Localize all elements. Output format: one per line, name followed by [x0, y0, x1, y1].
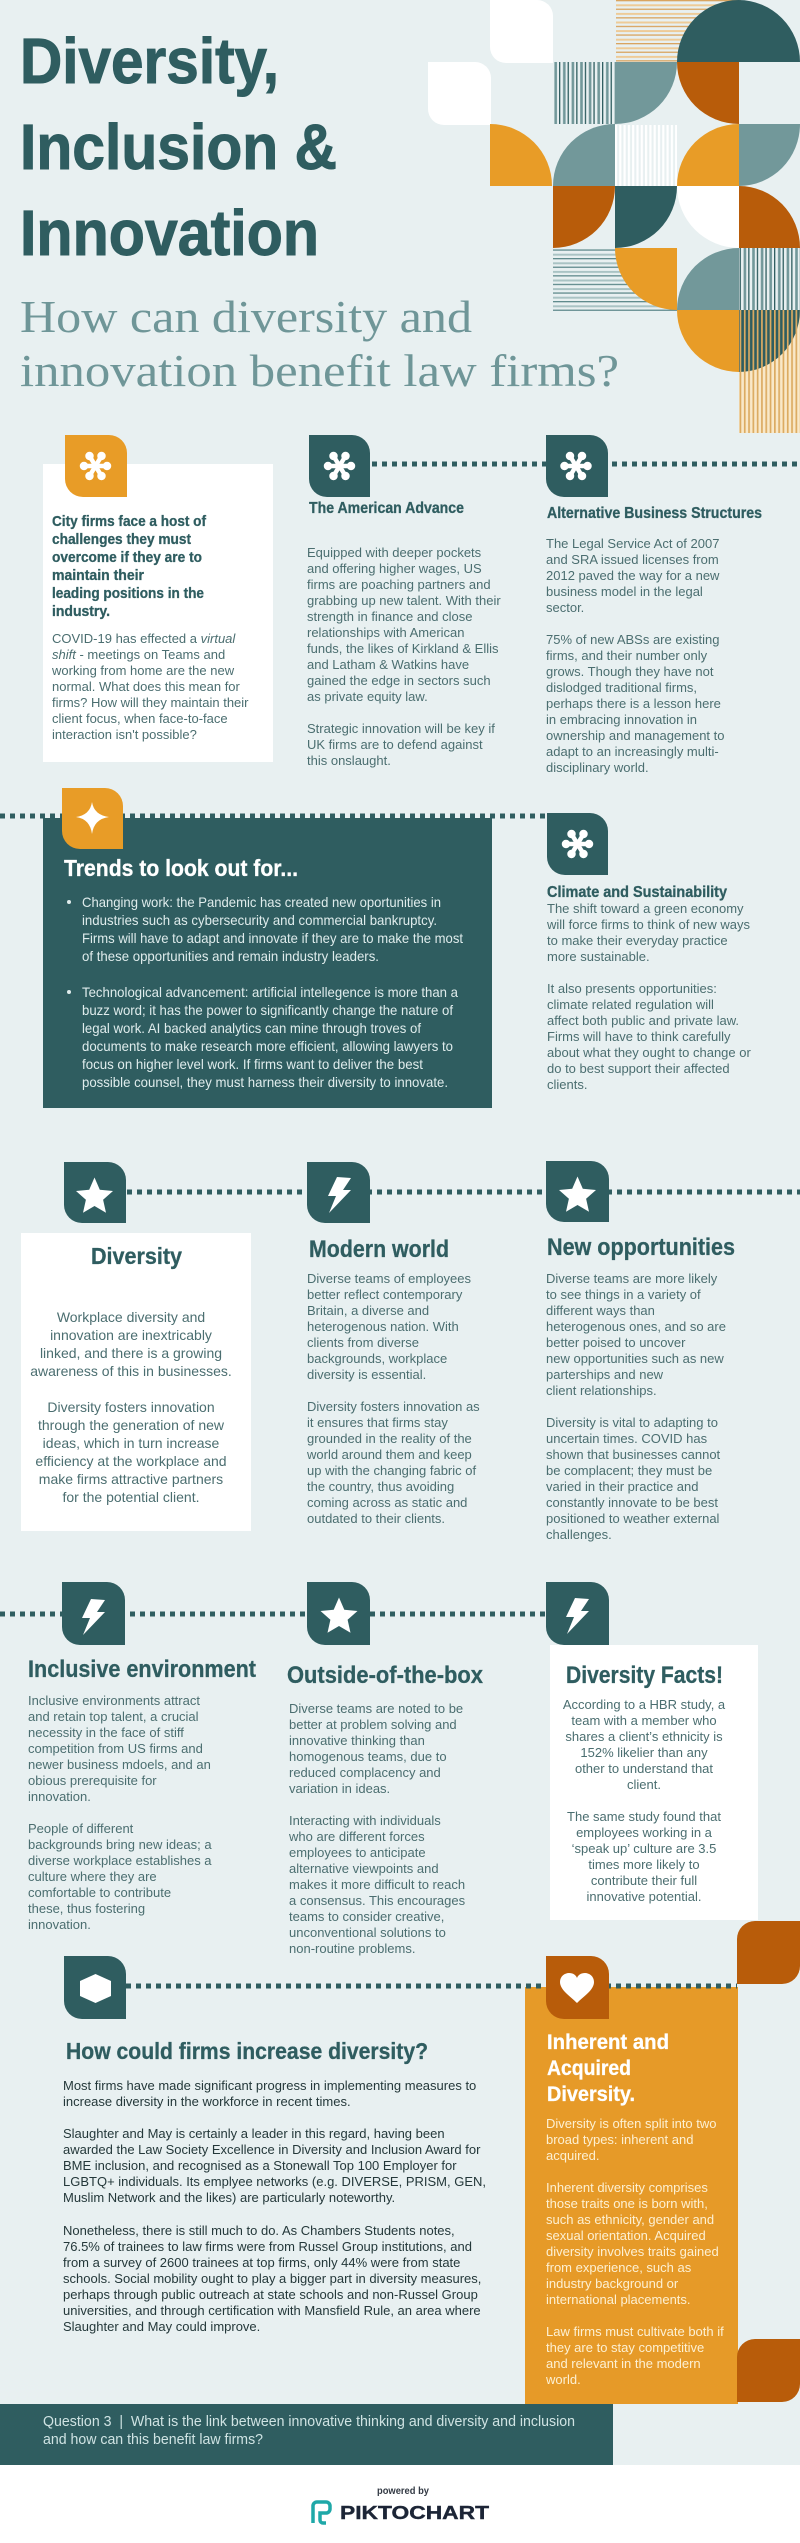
body: shares a client’s ethnicity is — [565, 1729, 723, 1744]
heading: Inherent and — [547, 2031, 669, 2054]
heading: Acquired — [547, 2057, 631, 2080]
icon: asterisk orange — [65, 435, 127, 497]
intro heading: challenges they must — [52, 532, 191, 548]
heading: Diversity. — [547, 2083, 635, 2106]
intro body: firms? How will they maintain their — [52, 695, 249, 710]
body: and relevant in the modern — [546, 2356, 701, 2371]
decorative tile top — [737, 1921, 800, 1984]
body: The shift toward a green economy — [547, 901, 744, 916]
body: acquired. — [546, 2148, 599, 2163]
panel: inclusive environment — [28, 1582, 256, 1932]
footer branding: powered by — [377, 2486, 429, 2497]
icon: star — [307, 1582, 370, 1645]
body: sector. — [546, 600, 584, 615]
body: increase diversity in the workforce in recent times. — [63, 2094, 351, 2109]
body: awareness of this in businesses. — [30, 1363, 232, 1379]
body: constantly innovate to be best — [546, 1495, 718, 1510]
body: unconventional solutions to — [289, 1925, 446, 1940]
body: these, thus fostering — [28, 1901, 145, 1916]
body: it ensures that firms stay — [307, 1415, 448, 1430]
intro body: COVID-19 has effected a virtual — [52, 631, 235, 646]
body: perhaps there is a lesson here — [546, 696, 721, 711]
body: BME inclusion, and recognised as a Stonewall Top 100 Employer for — [63, 2158, 457, 2173]
intro body: shift - meetings on Teams and — [52, 647, 225, 662]
body: such as ethnicity, gender and — [546, 2212, 714, 2227]
icon: asterisk — [309, 435, 370, 497]
bullet list: buzz word; it has the power to significantly change the nature of — [82, 1003, 453, 1018]
connector dots row 5 — [126, 1984, 737, 1988]
body: broad types: inherent and — [546, 2132, 693, 2147]
body: The same study found that — [567, 1809, 721, 1824]
icon: star — [64, 1162, 126, 1223]
body: heterogenous nation. With — [307, 1319, 459, 1334]
body: People of different — [28, 1821, 134, 1836]
panel: the American advance — [307, 435, 501, 768]
body: as private equity law. — [307, 689, 428, 704]
bullet list: documents to make research more efficient, allowing lawyers to — [82, 1039, 453, 1054]
connector dots row 1 — [372, 462, 800, 466]
body: coming across as static and — [307, 1495, 467, 1510]
panel: climate and sustainability — [546, 813, 751, 1092]
bullet list: industries such as cybersecurity and commercial bankruptcy. — [82, 913, 437, 928]
body: for the potential client. — [63, 1489, 199, 1505]
body: Firms will have to think carefully — [547, 1029, 731, 1044]
body: affect both public and private law. — [547, 1013, 739, 1028]
title: Inclusion & — [20, 111, 337, 183]
panel: trends to look out for — [0, 788, 546, 1108]
body: better at problem solving and — [289, 1717, 457, 1732]
body: from experience, such as — [546, 2260, 692, 2275]
footer question band: Question 3 | What is the link between innovative thinking and diversity and inclusion — [43, 2414, 575, 2430]
connector dots row 3 — [127, 1190, 800, 1194]
body: and SRA issued licenses from — [546, 552, 719, 567]
title — [20, 25, 337, 269]
body: Diverse teams are noted to be — [289, 1701, 463, 1716]
body: Workplace diversity and — [57, 1309, 205, 1325]
body: relationships with American — [307, 625, 465, 640]
body: Strategic innovation will be key if — [307, 721, 495, 736]
body: Muslim Network and the likes) are particularly noteworthy. — [63, 2190, 395, 2205]
intro heading: maintain their — [52, 568, 144, 584]
body: varied in their practice and — [546, 1479, 698, 1494]
heading — [547, 2031, 669, 2106]
body: in embracing innovation in — [546, 712, 697, 727]
intro heading: City firms face a host of — [52, 514, 206, 530]
icon: asterisk — [546, 435, 608, 497]
body: Inherent diversity comprises — [546, 2180, 708, 2195]
body: Inclusive environments attract — [28, 1693, 200, 1708]
panel: new opportunities — [546, 1161, 735, 1542]
body: teams to consider creative, — [289, 1909, 444, 1924]
body: Diverse teams are more likely — [546, 1271, 718, 1286]
decorative tile bottom — [737, 2339, 800, 2402]
bullet list: legal work. AI backed analytics can mine through troves of — [82, 1021, 421, 1036]
panel: diversity facts — [546, 1582, 758, 1920]
body: do to best support their affected — [547, 1061, 730, 1076]
icon: lightning bolt — [546, 1582, 609, 1645]
panel background — [43, 818, 492, 1108]
body: firms, and their number only — [546, 648, 708, 663]
body: and Latham & Watkins have — [307, 657, 469, 672]
geometric pattern — [428, 0, 800, 433]
body: The Legal Service Act of 2007 — [546, 536, 719, 551]
bullet list: focus on higher level work. If firms want to deliver the best — [82, 1057, 423, 1072]
body: about what they ought to change or — [547, 1045, 751, 1060]
body: alternative viewpoints and — [289, 1861, 439, 1876]
body: ownership and management to — [546, 728, 725, 743]
body: adapt to an increasingly multi- — [546, 744, 719, 759]
body: Diversity fosters innovation as — [307, 1399, 480, 1414]
card background — [43, 464, 273, 762]
panel: intro card — [43, 435, 273, 762]
heading: Diversity Facts! — [566, 1662, 723, 1689]
intro heading: leading positions in the — [52, 586, 204, 602]
subtitle: How can diversity and — [20, 291, 472, 342]
heading: Alternative Business Structures — [547, 505, 762, 522]
body: innovative thinking than — [289, 1733, 425, 1748]
body: 76.5% of trainees to law firms were from Russel Group institutions, and — [63, 2239, 472, 2254]
body: Diversity is often split into two — [546, 2116, 717, 2131]
footer branding: PIKTOCHART — [340, 2503, 489, 2523]
body: will force firms to think of new ways — [546, 917, 751, 932]
body: It also presents opportunities: — [547, 981, 717, 996]
body: through the generation of new — [38, 1417, 225, 1433]
bullet list — [67, 895, 463, 1090]
body: necessity in the face of stiff — [28, 1725, 184, 1740]
body: makes it more difficult to reach — [289, 1877, 465, 1892]
body: who are different forces — [288, 1829, 425, 1844]
body: heterogenous ones, and so are — [546, 1319, 726, 1334]
icon: heart — [546, 1956, 609, 2019]
body: diversity is essential. — [307, 1367, 426, 1382]
body: better reflect contemporary — [307, 1287, 463, 1302]
heading: New opportunities — [547, 1234, 735, 1261]
intro body: interaction isn't possible? — [52, 727, 197, 742]
body: world. — [545, 2372, 581, 2387]
body: schools. Social mobility ought to play a bigger part in diversity measures, — [63, 2271, 481, 2286]
panel: outside of the box — [287, 1582, 484, 1956]
panel background — [525, 1987, 738, 2404]
body: uncertain times. COVID has — [546, 1431, 708, 1446]
body: comfortable to contribute — [28, 1885, 171, 1900]
heading: How could firms increase diversity? — [66, 2038, 428, 2064]
body: Britain, a diverse and — [307, 1303, 429, 1318]
body: better poised to uncover — [546, 1335, 686, 1350]
intro heading: industry. — [52, 604, 110, 620]
body: Law firms must cultivate both if — [546, 2324, 724, 2339]
body: contribute their full — [591, 1873, 697, 1888]
body: Diverse teams of employees — [307, 1271, 472, 1286]
body: clients. — [547, 1077, 587, 1092]
body: times more likely to — [588, 1857, 700, 1872]
body: different ways than — [546, 1303, 655, 1318]
panel: inherent text — [545, 1956, 724, 2387]
body: 2012 paved the way for a new — [546, 568, 720, 583]
heading: Diversity — [91, 1243, 182, 1269]
connector dots row 2 — [0, 814, 546, 818]
subtitle: innovation benefit law firms? — [20, 345, 619, 396]
body: diverse workplace establishes a — [28, 1853, 212, 1868]
panel: alternative business structures — [546, 435, 762, 775]
body: team with a member who — [571, 1713, 717, 1728]
body: innovative potential. — [587, 1889, 701, 1904]
icon: hexagon — [64, 1956, 126, 2019]
footer question band — [0, 2404, 613, 2465]
intro body: client focus, when face-to-face — [52, 711, 228, 726]
body: universities, and through certification with Mansfield Rule, an area where — [63, 2303, 481, 2318]
bullet list: Changing work: the Pandemic has created new oportunities in — [82, 895, 441, 910]
body: a consensus. This encourages — [289, 1893, 466, 1908]
body: efficiency at the workplace and — [35, 1453, 227, 1469]
body: grabbing up new talent. With their — [307, 593, 501, 608]
body: parterships and new — [546, 1367, 664, 1382]
body: ideas, which in turn increase — [43, 1435, 220, 1451]
bullet list: of these opportunities and remain industry leaders. — [82, 949, 379, 964]
title: Innovation — [20, 197, 319, 269]
body: those traits one is born with, — [546, 2196, 708, 2211]
body: backgrounds bring new ideas; a — [28, 1837, 212, 1852]
body: 152% likelier than any — [580, 1745, 708, 1760]
body: gained the edge in sectors such — [307, 673, 491, 688]
body: disciplinary world. — [546, 760, 649, 775]
body: grows. Though they have not — [546, 664, 714, 679]
body: client. — [627, 1777, 661, 1792]
heading: Climate and Sustainability — [547, 884, 727, 901]
card background — [21, 1233, 251, 1531]
body: climate related regulation will — [547, 997, 714, 1012]
body: up with the changing fabric of — [307, 1463, 476, 1478]
icon: lightning bolt — [62, 1582, 125, 1645]
body: positioned to weather external — [546, 1511, 720, 1526]
body: strength in finance and close — [307, 609, 472, 624]
panel: modern world — [306, 1162, 480, 1526]
panel: how could firms increase diversity — [63, 1956, 486, 2334]
body: clients from diverse — [307, 1335, 419, 1350]
body: challenges. — [546, 1527, 612, 1542]
body: the country, thus avoiding — [307, 1479, 454, 1494]
body: client relationships. — [546, 1383, 657, 1398]
body: make firms attractive partners — [39, 1471, 223, 1487]
body: According to a HBR study, a — [563, 1697, 726, 1712]
body: world around them and keep — [306, 1447, 472, 1462]
body: LGBTQ+ individuals. Its emplyee networks (e.g. DIVERSE, PRISM, GEN, — [63, 2174, 486, 2189]
intro body: normal. What does this mean for — [52, 679, 241, 694]
body: innovation. — [28, 1789, 91, 1804]
heading: Trends to look out for... — [64, 855, 298, 881]
body: from a survey of 2600 trainees at top firms, only 44% were from state — [63, 2255, 460, 2270]
body: international placements. — [546, 2292, 691, 2307]
body: 75% of new ABSs are existing — [546, 632, 719, 647]
title: Diversity, — [20, 25, 279, 97]
icon: sparkle — [62, 788, 123, 849]
body: variation in ideas. — [289, 1781, 390, 1796]
body: innovation. — [28, 1917, 91, 1932]
body: shown that businesses cannot — [546, 1447, 721, 1462]
body: to see things in a variety of — [546, 1287, 701, 1302]
body: and retain top talent, a crucial — [28, 1709, 199, 1724]
body: Nonetheless, there is still much to do. As Chambers Students notes, — [63, 2223, 455, 2238]
body: be complacent; they must be — [546, 1463, 712, 1478]
body: diversity involves traits gained — [546, 2244, 719, 2259]
bullet list: Firms will have to adapt and innovate if they are to make the most — [82, 931, 463, 946]
body: competition from US firms and — [28, 1741, 203, 1756]
body: this onslaught. — [307, 753, 391, 768]
body: culture where they are — [28, 1869, 157, 1884]
body: awarded the Law Society Excellence in Diversity and Inclusion Award for — [63, 2142, 481, 2157]
body: Equipped with deeper pockets — [307, 545, 482, 560]
body: ‘speak up’ culture are 3.5 — [572, 1841, 716, 1856]
body: to make their everyday practice — [547, 933, 728, 948]
body: and offering higher wages, US — [307, 561, 482, 576]
body: outdated to their clients. — [307, 1511, 445, 1526]
body: Most firms have made significant progress in implementing measures to — [63, 2078, 476, 2093]
body: Slaughter and May is certainly a leader in this regard, having been — [63, 2126, 445, 2141]
body: innovation are inextricably — [50, 1327, 212, 1343]
panel: diversity card — [21, 1162, 251, 1531]
body: backgrounds, workplace — [307, 1351, 447, 1366]
body: they are to stay competitive — [546, 2340, 704, 2355]
body: new opportunities such as new — [546, 1351, 724, 1366]
body: newer business mdoels, and an — [28, 1757, 211, 1772]
body: Diversity fosters innovation — [47, 1399, 215, 1415]
subtitle — [20, 291, 619, 396]
body: non-routine problems. — [289, 1941, 415, 1956]
icon: lightning bolt — [307, 1162, 370, 1223]
body: Interacting with individuals — [289, 1813, 441, 1828]
heading: Modern world — [309, 1236, 449, 1263]
intro body: working from home are the new — [51, 663, 235, 678]
bullet list: Technological advancement: artificial intellegence is more than a — [82, 985, 458, 1000]
body: funds, the likes of Kirkland & Ellis — [307, 641, 499, 656]
body: sexual orientation. Acquired — [546, 2228, 706, 2243]
body: firms are poaching partners and — [307, 577, 491, 592]
intro heading: overcome if they are to — [52, 550, 202, 566]
body: employees working in a — [576, 1825, 713, 1840]
body: industry background or — [546, 2276, 679, 2291]
intro heading — [52, 514, 206, 620]
body: more sustainable. — [547, 949, 650, 964]
footer question band: and how can this benefit law firms? — [43, 2432, 263, 2448]
heading: Inclusive environment — [28, 1656, 256, 1683]
heading: Outside-of-the-box — [287, 1662, 484, 1689]
body: business model in the legal — [546, 584, 703, 599]
body: homogenous teams, due to — [289, 1749, 447, 1764]
heading: The American Advance — [309, 500, 464, 517]
body: perhaps through public outreach at state schools and non-Russel Group — [63, 2287, 478, 2302]
icon: asterisk — [547, 813, 608, 875]
bullet list: possible counsel, they must harness their diversity to innovate. — [82, 1075, 448, 1090]
connector dots row 4 — [0, 1612, 546, 1616]
body: obious prerequisite for — [28, 1773, 157, 1788]
body: other to understand that — [575, 1761, 713, 1776]
body: UK firms are to defend against — [307, 737, 483, 752]
body: grounded in the reality of the — [307, 1431, 472, 1446]
body: dislodged traditional firms, — [546, 680, 697, 695]
card background — [550, 1645, 758, 1920]
body: linked, and there is a growing — [40, 1345, 222, 1361]
body: Diversity is vital to adapting to — [546, 1415, 718, 1430]
body: Slaughter and May could improve. — [63, 2319, 260, 2334]
footer branding — [0, 2465, 800, 2543]
body: employees to anticipate — [289, 1845, 426, 1860]
panel: inherent and acquired diversity — [525, 1921, 800, 2404]
icon: star — [546, 1161, 609, 1222]
body: reduced complacency and — [289, 1765, 441, 1780]
